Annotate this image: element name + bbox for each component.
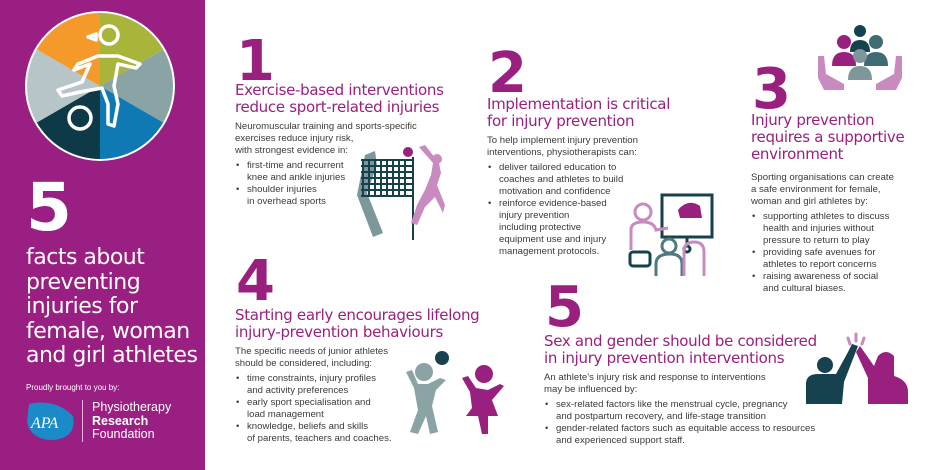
heading 1: reduce sport-related injuries — [235, 98, 439, 116]
title text: facts about — [26, 245, 144, 270]
icon: volleyball net and player — [357, 145, 445, 240]
body 2: To help implement injury prevention — [487, 135, 638, 146]
body 3: providing safe avenues for — [763, 247, 876, 258]
heading 2: for injury prevention — [487, 112, 634, 130]
body 2: motivation and confidence — [499, 186, 610, 197]
fact 4 — [235, 249, 479, 444]
heading 3: environment — [751, 145, 843, 163]
body 2: management protocols. — [499, 246, 599, 257]
panel: left title panel — [0, 0, 205, 470]
body 5: sex-related factors like the menstrual cycle, pregnancy — [556, 399, 787, 410]
heading 2: Implementation is critical — [487, 95, 670, 113]
number 5: 5 — [545, 275, 584, 340]
body 4 — [235, 346, 392, 444]
heading 1 — [235, 81, 444, 116]
logo: APA — [27, 402, 74, 440]
heading 4 — [235, 306, 479, 341]
big number 5: 5 — [26, 169, 72, 246]
body 3: and cultural biases. — [763, 283, 846, 294]
heading 3: requires a supportive — [751, 128, 904, 146]
body 5: and postpartum recovery, and life-stage transition — [556, 411, 766, 422]
title text: female, woman — [26, 318, 190, 344]
heading 1: Exercise-based interventions — [235, 81, 444, 99]
number 2: 2 — [488, 41, 527, 106]
icon: soccer player circle — [25, 11, 175, 161]
body 4: knowledge, beliefs and skills — [247, 421, 368, 432]
body 5 — [544, 372, 815, 446]
body 3: Sporting organisations can create — [751, 172, 894, 183]
panel: left title panel: Foundation — [92, 427, 155, 441]
body 3: health and injuries without — [763, 223, 874, 234]
title text — [26, 245, 197, 368]
title text: and girl athletes — [26, 343, 197, 368]
panel: left title panel: Physiotherapy — [92, 400, 171, 414]
body 5: An athlete’s injury risk and response to interventions — [544, 372, 766, 383]
body 1 — [235, 121, 417, 207]
fact 1 — [235, 29, 444, 207]
heading 4: Starting early encourages lifelong — [235, 306, 479, 324]
body 4: early sport specialisation and — [247, 397, 371, 408]
logo: APA: APA — [30, 415, 58, 432]
fact 2 — [487, 41, 670, 257]
body 3: supporting athletes to discuss — [763, 211, 889, 222]
body 2: equipment use and injury — [499, 234, 606, 245]
body 1: exercises reduce injury risk, — [235, 133, 353, 144]
body 1: first-time and recurrent — [247, 160, 344, 171]
logo text — [82, 400, 83, 442]
body 4: should be considered, including: — [235, 358, 372, 369]
heading 5: Sex and gender should be considered — [544, 332, 817, 350]
body 2 — [487, 135, 638, 257]
body 2: interventions, physiotherapists can: — [487, 147, 637, 158]
body 3: raising awareness of social — [763, 271, 878, 282]
heading 3: Injury prevention — [751, 111, 874, 129]
body 5: and experienced support staff. — [556, 435, 685, 446]
fact 3 — [751, 57, 904, 294]
body 4: load management — [247, 409, 324, 420]
title text: preventing — [26, 270, 140, 294]
body 1: in overhead sports — [247, 196, 326, 207]
body 3: woman and girl athletes by: — [751, 196, 868, 207]
body 3: athletes to report concerns — [763, 259, 877, 270]
icon: children playing — [406, 351, 504, 434]
body 2: injury prevention — [499, 210, 569, 221]
body 2: including protective — [499, 222, 581, 233]
icon: presentation — [628, 194, 714, 276]
body 1: knee and ankle injuries — [247, 172, 345, 183]
icon: high five — [806, 332, 908, 404]
body 5: gender-related factors such as equitable access to resources — [556, 423, 815, 434]
body 4: time constraints, injury profiles — [247, 373, 376, 384]
panel: left title panel: Research — [92, 414, 148, 428]
body 5: may be influenced by: — [544, 384, 637, 395]
body 3 — [751, 172, 894, 294]
body 3: a safe environment for female, — [751, 184, 881, 195]
body 4: of parents, teachers and coaches. — [247, 433, 392, 444]
body 4: The specific needs of junior athletes — [235, 346, 388, 357]
number 3: 3 — [752, 57, 791, 122]
fact 5 — [544, 275, 817, 446]
body 4: and activity preferences — [247, 385, 348, 396]
body 2: reinforce evidence-based — [499, 198, 607, 209]
number 1: 1 — [236, 29, 275, 94]
credit text: Proudly brought to you by: — [26, 383, 119, 392]
body 1: with strongest evidence in: — [235, 145, 348, 156]
title text: injuries for — [26, 294, 138, 319]
icon: hands with people — [818, 25, 902, 90]
body 2: deliver tailored education to — [499, 162, 616, 173]
body 1: shoulder injuries — [247, 184, 317, 195]
heading 5 — [544, 332, 817, 367]
heading 4: injury-prevention behaviours — [235, 323, 443, 341]
body 2: coaches and athletes to build — [499, 174, 623, 185]
heading 5: in injury prevention interventions — [544, 349, 784, 367]
body 1: Neuromuscular training and sports-specific — [235, 121, 417, 132]
body 3: pressure to return to play — [763, 235, 870, 246]
heading 2 — [487, 95, 670, 130]
heading 3 — [751, 111, 904, 163]
number 4: 4 — [236, 249, 275, 314]
